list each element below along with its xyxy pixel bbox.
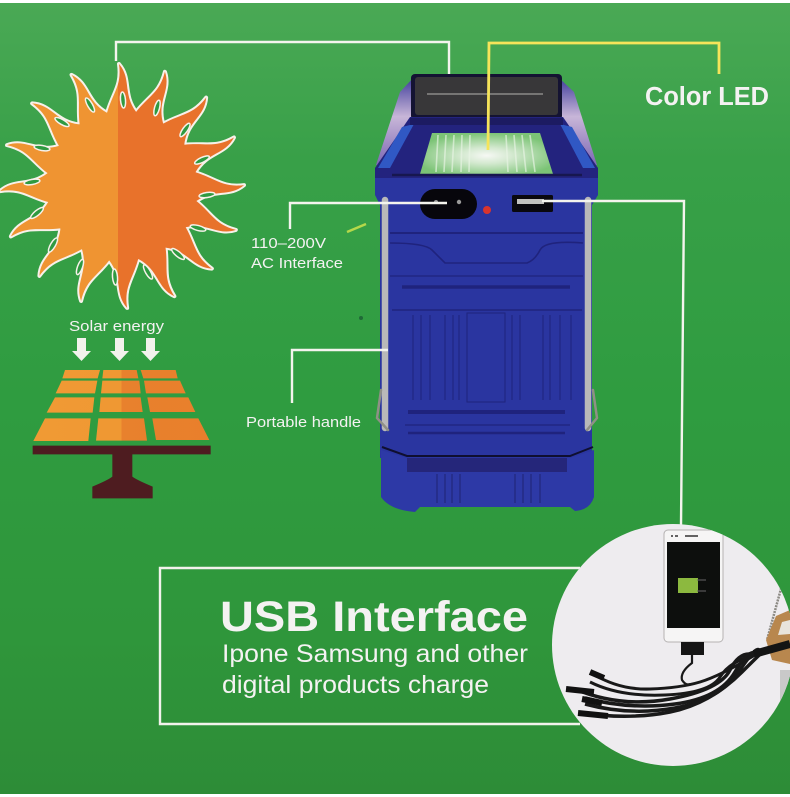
- lantern purple side shoulders: [376, 77, 597, 165]
- label: AC interface: [251, 236, 343, 272]
- icon: sun: [0, 62, 246, 310]
- decorative print specks: [347, 224, 366, 232]
- handles: [377, 200, 597, 430]
- phone: [664, 530, 723, 642]
- connector: sun to solar panel: [116, 42, 449, 93]
- heading: USB Interface: USB Interface: [220, 593, 528, 641]
- text: USB description: [222, 640, 528, 699]
- text: USB description: digital products charge: [222, 671, 489, 699]
- lantern main body: [375, 178, 598, 458]
- text: USB description: Ipone Samsung and other: [222, 640, 528, 668]
- body moulding lines: [390, 233, 583, 433]
- label: portable handle: Portable handle: [246, 414, 361, 431]
- label: solar energy: Solar energy: [69, 318, 165, 335]
- AC socket: [420, 189, 477, 219]
- red indicator light: [483, 206, 491, 214]
- wall edge and hand: [766, 588, 790, 702]
- label: AC interface: AC Interface: [251, 256, 343, 272]
- lantern: [375, 74, 598, 512]
- icon: solar panel: [33, 370, 211, 498]
- USB interface text frame: [160, 568, 580, 724]
- connector: USB port to circle: [542, 201, 684, 526]
- photo circle: phone charging: [552, 524, 790, 766]
- charging cables: [566, 642, 790, 716]
- icon: three down arrows: [72, 338, 160, 361]
- LED light window: [420, 133, 553, 174]
- connector: color LED (yellow): [488, 43, 719, 150]
- label: Color LED: Color LED: [645, 83, 769, 111]
- label: AC interface: 110–200V: [251, 236, 326, 252]
- connector: AC interface: [290, 203, 447, 229]
- lantern upper housing: [375, 117, 598, 180]
- lantern solar panel: [411, 74, 562, 120]
- connector: portable handle: [292, 350, 388, 403]
- USB port: [512, 195, 553, 212]
- lantern base: [381, 447, 594, 512]
